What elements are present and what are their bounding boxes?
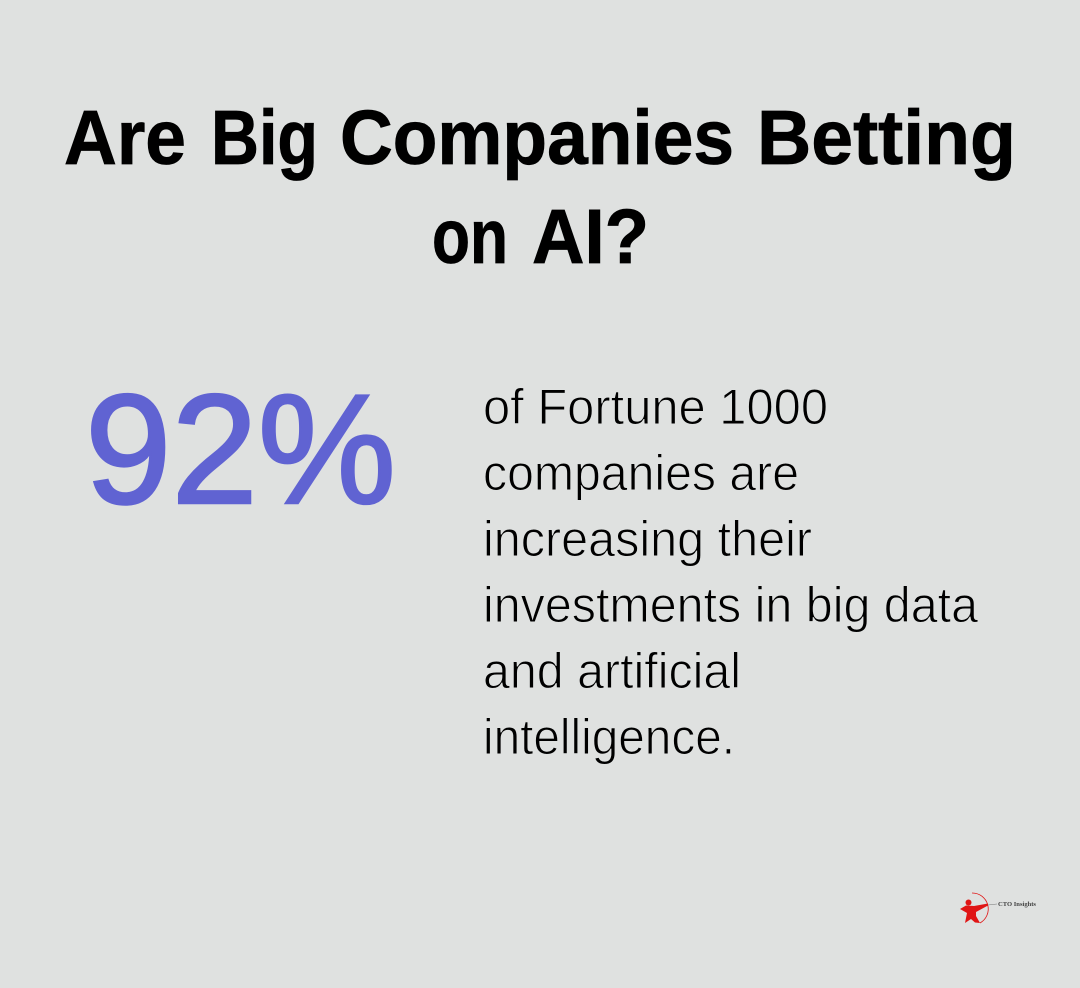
title: Companies bbox=[340, 95, 734, 181]
title: Betting bbox=[757, 95, 1016, 181]
title bbox=[64, 95, 1016, 280]
description text: increasing their bbox=[483, 511, 812, 567]
description text: intelligence. bbox=[483, 709, 735, 765]
description text: investments in big data bbox=[483, 577, 978, 633]
title: AI? bbox=[532, 194, 649, 280]
logo wordmark: CTO Insights bbox=[998, 902, 1037, 908]
description text bbox=[483, 379, 978, 765]
description text: companies are bbox=[483, 445, 799, 501]
description text: and artificial bbox=[483, 643, 741, 699]
statistic: 92%: 92% bbox=[85, 363, 396, 537]
title: Are bbox=[64, 95, 186, 181]
title: on bbox=[432, 194, 508, 280]
icon: archer with bow bbox=[960, 893, 997, 923]
description text: of Fortune 1000 bbox=[483, 379, 828, 435]
logo: CTO Insights archer bbox=[960, 893, 1037, 923]
title: Big bbox=[211, 95, 318, 181]
